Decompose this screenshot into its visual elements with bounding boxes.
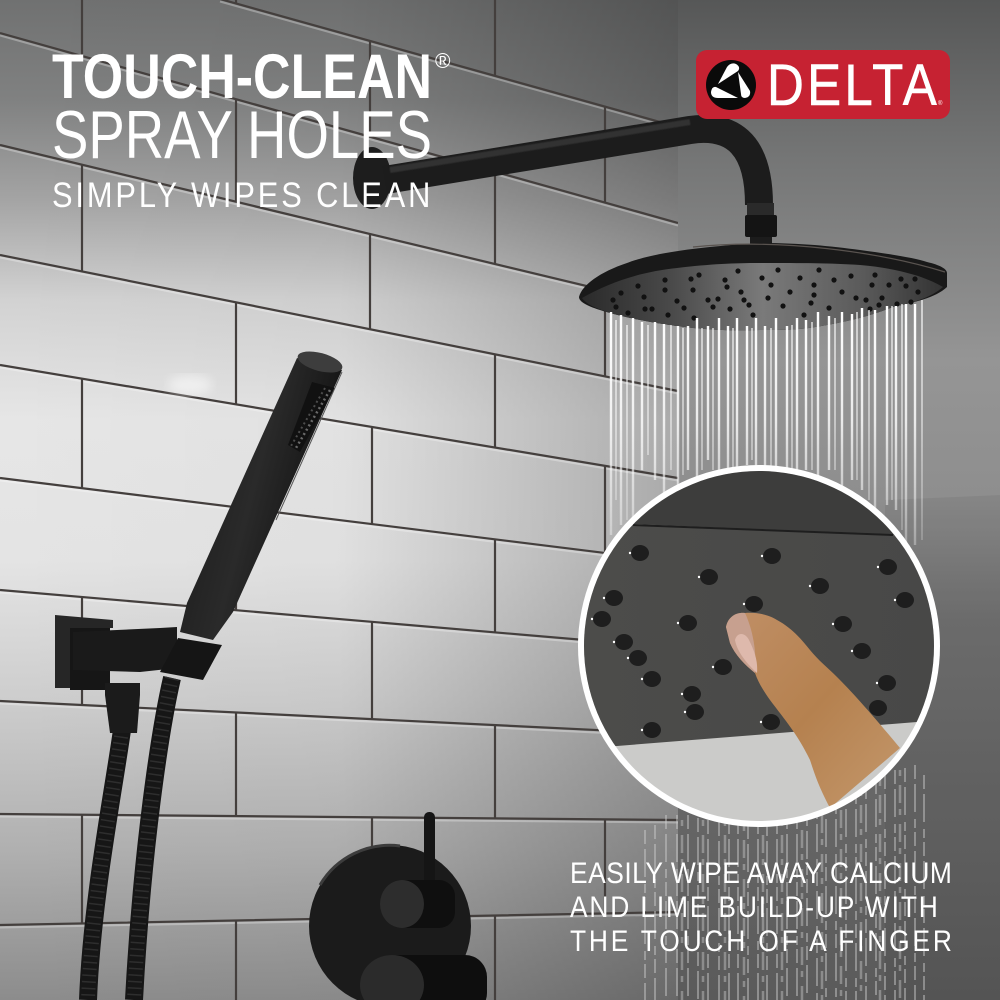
fingernail bbox=[735, 634, 757, 673]
title: TOUCH-CLEAN bbox=[52, 42, 432, 112]
rain shower head bbox=[579, 243, 947, 330]
spray nozzles bbox=[610, 267, 921, 321]
subtitle: SPRAY HOLES bbox=[52, 97, 432, 173]
hose left bbox=[88, 730, 122, 1000]
title bbox=[52, 42, 451, 214]
lever stem bbox=[424, 812, 435, 884]
falling water from rain head bbox=[611, 300, 922, 560]
hand shower bbox=[55, 347, 345, 1000]
falling water below inset bbox=[645, 765, 924, 1000]
mount arm bbox=[73, 627, 177, 672]
wordmark: DELTA bbox=[767, 53, 937, 118]
lower knob bbox=[360, 955, 487, 1000]
nozzle plate bbox=[570, 522, 950, 748]
Delta logo: ® bbox=[938, 100, 943, 107]
tagline: SIMPLY WIPES CLEAN bbox=[52, 175, 430, 214]
logo mark bbox=[706, 60, 756, 110]
Delta logo bbox=[696, 50, 950, 119]
handle spray face bbox=[288, 382, 335, 452]
hose right bbox=[134, 678, 172, 1000]
wall flange bbox=[353, 147, 391, 209]
arm connector bbox=[747, 203, 774, 215]
callout text: AND LIME BUILD-UP WITH bbox=[570, 889, 938, 923]
inset circle: finger wiping spray holes bbox=[570, 460, 950, 840]
inset nozzles bbox=[591, 545, 914, 738]
top edge of shower head bbox=[634, 471, 894, 535]
swivel bracket bbox=[160, 638, 222, 680]
upper knob bbox=[380, 880, 455, 928]
trim plate bbox=[309, 845, 471, 1000]
callout text bbox=[570, 855, 952, 957]
handle bbox=[180, 358, 342, 640]
hose connector bbox=[105, 683, 140, 733]
valve trim bbox=[309, 812, 487, 1000]
callout text: EASILY WIPE AWAY CALCIUM bbox=[570, 855, 952, 889]
title: ® bbox=[435, 50, 451, 73]
wall mount plate bbox=[55, 615, 113, 688]
callout text: THE TOUCH OF A FINGER bbox=[570, 923, 952, 957]
finger bbox=[726, 613, 900, 808]
shower arm bbox=[353, 122, 777, 244]
